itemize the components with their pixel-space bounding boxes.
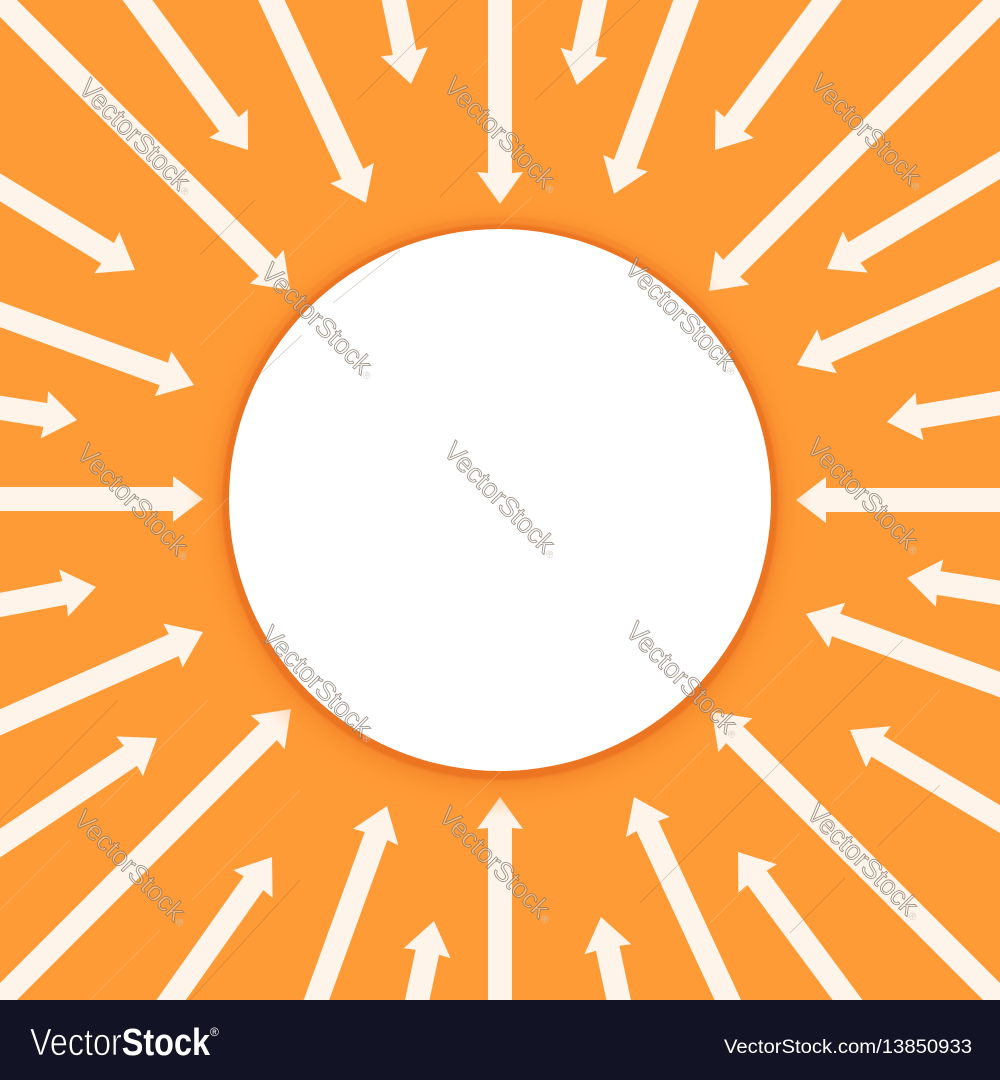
arrow: right upper 1 (815, 137, 1000, 290)
footer registered mark: ® (210, 1025, 219, 1039)
arrow: left upper 1 (0, 285, 202, 408)
circle outer orange ring (217, 217, 783, 783)
arrow: right lower 1 (798, 591, 1000, 712)
watermark 5: VectorStock (619, 253, 742, 376)
watermark 3: ® (909, 180, 922, 194)
watermark 2: ® (543, 183, 556, 197)
arrow: bottom right 3 (612, 787, 756, 1025)
arrow: top right long (692, 0, 1000, 308)
arrow: right upper short (883, 377, 1000, 446)
arrow: top left 2 (109, 0, 267, 164)
arrow: top right 2 (696, 0, 855, 164)
watermark 11: ® (173, 916, 186, 930)
watermark 6: ® (176, 550, 189, 564)
arrow: left lower 2 (0, 718, 170, 872)
arrow: bottom left long (0, 692, 308, 1026)
circle soft shadow (188, 194, 812, 818)
arrow: top left long (0, 0, 307, 307)
arrow: bottom short right (578, 912, 645, 1020)
watermark 4: ® (360, 369, 373, 383)
arrow: bottom right long (695, 695, 1000, 1029)
watermark 4: VectorStock (255, 257, 378, 380)
watermark 1: ® (178, 185, 191, 199)
watermark 12: ® (538, 913, 551, 927)
watermark 12: VectorStock (433, 801, 556, 924)
footer url: VectorStock.com/13850933 (724, 1037, 972, 1058)
watermark 7: VectorStock (438, 436, 561, 559)
arrow: right lower 2 (838, 709, 1000, 848)
watermark 2: VectorStock (438, 71, 561, 194)
arrow: top right 3 (592, 0, 714, 202)
watermark 10: ® (725, 728, 738, 742)
arrow: left lower short (0, 563, 100, 631)
arrow: top left 3 (243, 0, 388, 213)
watermark 7: ® (543, 548, 556, 562)
watermark 13: ® (906, 910, 919, 924)
watermark 8: VectorStock (801, 432, 924, 555)
watermarks (68, 68, 933, 933)
arrow: top centre (477, 0, 523, 204)
footer bar (0, 1000, 1000, 1080)
arrow: bottom right 2 (719, 838, 876, 1027)
arrow: left upper short (0, 382, 81, 444)
watermark 10: VectorStock (620, 616, 743, 739)
arrow: left centre (0, 476, 203, 522)
arrow: top short left (368, 0, 435, 89)
arrow: bottom short left (391, 916, 457, 1019)
watermark 11: VectorStock (68, 804, 191, 927)
watermark 3: VectorStock (804, 68, 927, 191)
watermark 5: ® (724, 365, 737, 379)
arrow: right upper 2 (787, 245, 1000, 387)
arrow: right centre (796, 477, 1000, 523)
watermark 1: VectorStock (73, 73, 196, 196)
arrow: right lower short (903, 554, 1000, 619)
arrow: bottom left 2 (143, 843, 292, 1026)
footer logo: VectorStock (30, 1022, 211, 1064)
watermark 6: VectorStock (71, 438, 194, 561)
watermark 13: VectorStock (801, 798, 924, 921)
arrow: top short right (554, 0, 622, 90)
watermark 9: ® (360, 732, 373, 746)
arrow: left upper 2 (0, 160, 148, 290)
arrow: left lower 1 (0, 610, 213, 751)
central white circle (229, 229, 771, 771)
arrow: bottom centre (477, 797, 523, 1007)
arrow: bottom left 3 (289, 798, 410, 1023)
circle inner dark ring (222, 224, 778, 780)
watermark 9: VectorStock (255, 620, 378, 743)
watermark 8: ® (906, 544, 919, 558)
